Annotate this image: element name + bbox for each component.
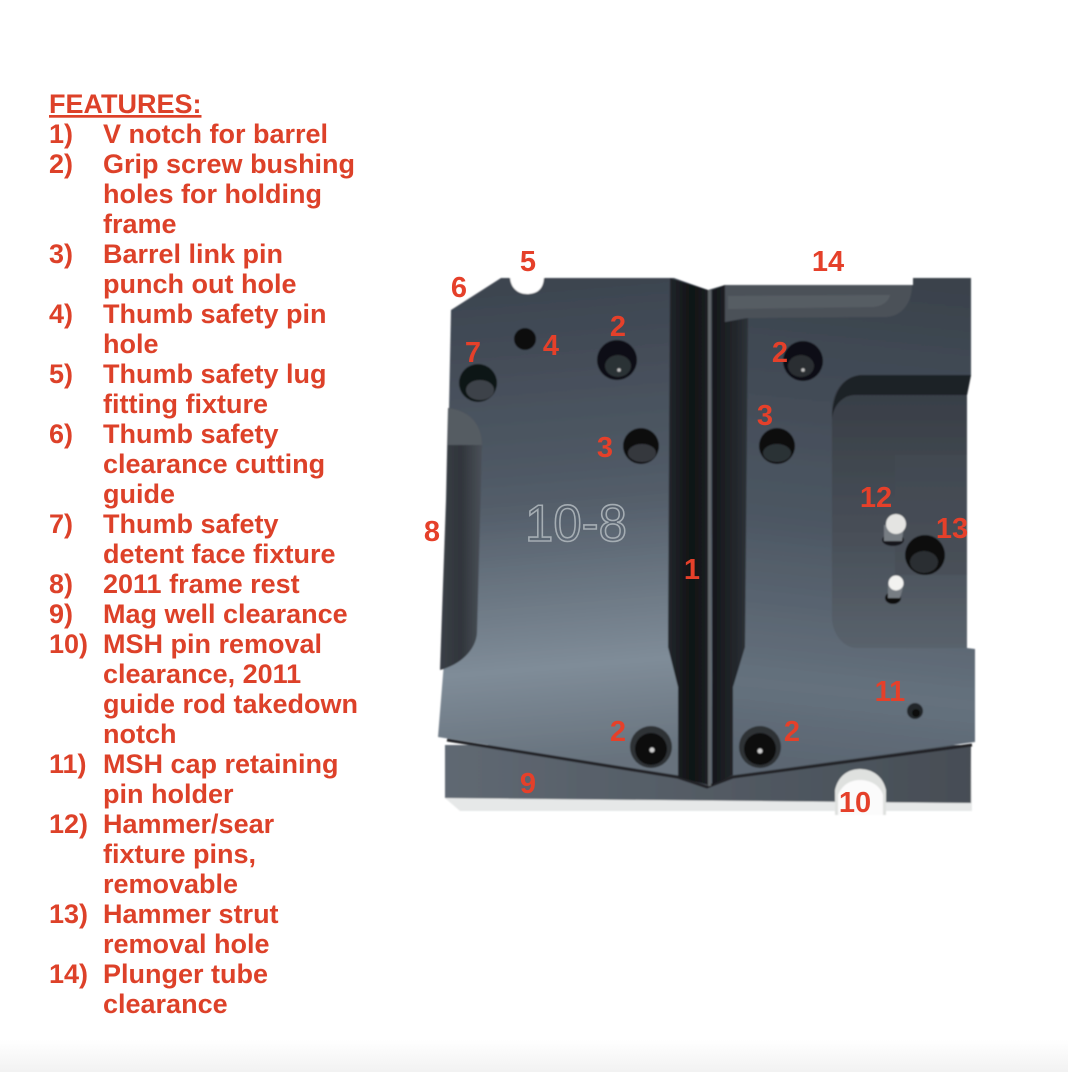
item 3: punch out hole xyxy=(103,269,296,299)
item 13 xyxy=(49,899,279,959)
number 2 bottom left: 2 xyxy=(610,716,626,748)
hole: thumb safety pin xyxy=(514,328,536,350)
item 5: fitting fixture xyxy=(103,389,268,419)
fixture pin lower xyxy=(885,576,904,604)
MSH pin notch xyxy=(835,769,886,815)
item 11: MSH cap retaining xyxy=(103,749,339,779)
item 12: removable xyxy=(103,869,238,899)
feature list xyxy=(49,89,358,1019)
item 1: 1) xyxy=(49,119,73,149)
item 7: Thumb safety xyxy=(103,509,279,539)
item 5: Thumb safety lug xyxy=(103,359,327,389)
left plate xyxy=(438,278,708,785)
item 8: 8) xyxy=(49,569,73,599)
hole: hammer strut xyxy=(905,535,945,575)
item 6: guide xyxy=(103,479,175,509)
item 3: 3) xyxy=(49,239,73,269)
item 4 xyxy=(49,299,327,359)
hole: grip screw bottom right xyxy=(739,726,781,768)
hole: barrel link right xyxy=(759,428,795,464)
item 6: Thumb safety xyxy=(103,419,279,449)
number 10: 10 xyxy=(839,787,871,819)
item 5: 5) xyxy=(49,359,73,389)
item 2: 2) xyxy=(49,149,73,179)
number 9: 9 xyxy=(520,768,536,800)
hole: barrel link left xyxy=(623,428,659,464)
item 2: holes for holding xyxy=(103,179,322,209)
fixture block photo xyxy=(438,276,975,815)
number 3 right: 3 xyxy=(757,400,773,432)
hole: grip screw top left xyxy=(597,340,637,380)
item 11: 11) xyxy=(49,749,87,779)
number 4: 4 xyxy=(543,330,559,362)
item 14 xyxy=(49,959,268,1019)
number 8: 8 xyxy=(424,516,440,548)
item 2: frame xyxy=(103,209,177,239)
frame rest xyxy=(440,408,482,670)
base plate xyxy=(445,745,972,811)
number 7: 7 xyxy=(465,337,481,369)
item 3 xyxy=(49,239,296,299)
item 4: hole xyxy=(103,329,159,359)
number 2 bottom right: 2 xyxy=(784,716,800,748)
item 14: clearance xyxy=(103,989,228,1019)
number 1: 1 xyxy=(684,554,700,586)
item 6: 6) xyxy=(49,419,73,449)
item 12: fixture pins, xyxy=(103,839,256,869)
item 6: clearance cutting xyxy=(103,449,325,479)
item 10: guide rod takedown xyxy=(103,689,358,719)
item 5 xyxy=(49,359,327,419)
number 13: 13 xyxy=(936,513,968,545)
item 2: Grip screw bushing xyxy=(103,149,355,179)
hole: thumb safety detent xyxy=(459,364,497,402)
number 11: 11 xyxy=(875,676,905,708)
item 13: 13) xyxy=(49,899,88,929)
item 7: detent face fixture xyxy=(103,539,336,569)
item 4: Thumb safety pin xyxy=(103,299,327,329)
shadow line between plate and base xyxy=(447,740,972,787)
item 11 xyxy=(49,749,339,809)
item 4: 4) xyxy=(49,299,73,329)
item 7: 7) xyxy=(49,509,73,539)
number 2 top left: 2 xyxy=(610,311,626,343)
left barrel groove xyxy=(668,278,708,785)
item 14: 14) xyxy=(49,959,88,989)
item 8: 2011 frame rest xyxy=(103,569,300,599)
item 12 xyxy=(49,809,275,899)
thumb safety lug notch xyxy=(510,276,544,294)
number 3 left: 3 xyxy=(597,432,613,464)
callout numbers xyxy=(424,246,968,819)
item 7 xyxy=(49,509,336,569)
number 2 top right: 2 xyxy=(772,337,788,369)
item 10 xyxy=(49,629,358,749)
item 14: Plunger tube xyxy=(103,959,268,989)
number 12: 12 xyxy=(860,482,892,514)
heading: features: FEATURES: xyxy=(49,89,202,119)
item 11: pin holder xyxy=(103,779,234,809)
hammer pocket xyxy=(832,375,971,648)
hole: MSH cap pin xyxy=(907,703,923,719)
plunger tube clearance xyxy=(725,285,912,322)
right plate xyxy=(708,278,975,785)
number 6: 6 xyxy=(451,272,467,304)
item 10: notch xyxy=(103,719,176,749)
item 2 xyxy=(49,149,355,239)
v notch ridge xyxy=(708,290,711,786)
item 3: Barrel link pin xyxy=(103,239,283,269)
item 1: V notch for barrel xyxy=(103,119,328,149)
item 13: removal hole xyxy=(103,929,270,959)
item 9: Mag well clearance xyxy=(103,599,348,629)
item 10: 10) xyxy=(49,629,88,659)
fixture pin upper xyxy=(882,514,906,546)
number 14: 14 xyxy=(812,246,844,278)
engraved 10-8 mark: 10-8 xyxy=(525,495,627,553)
item 12: Hammer/sear xyxy=(103,809,275,839)
item 13: Hammer strut xyxy=(103,899,279,929)
hole: grip screw top right xyxy=(783,341,823,381)
item 12: 12) xyxy=(49,809,88,839)
number 5: 5 xyxy=(520,246,536,278)
item 9: 9) xyxy=(49,599,73,629)
item 10: MSH pin removal xyxy=(103,629,322,659)
hole: grip screw bottom left xyxy=(630,726,672,768)
item 6 xyxy=(49,419,325,509)
right barrel groove xyxy=(712,285,748,785)
item 10: clearance, 2011 xyxy=(103,659,301,689)
